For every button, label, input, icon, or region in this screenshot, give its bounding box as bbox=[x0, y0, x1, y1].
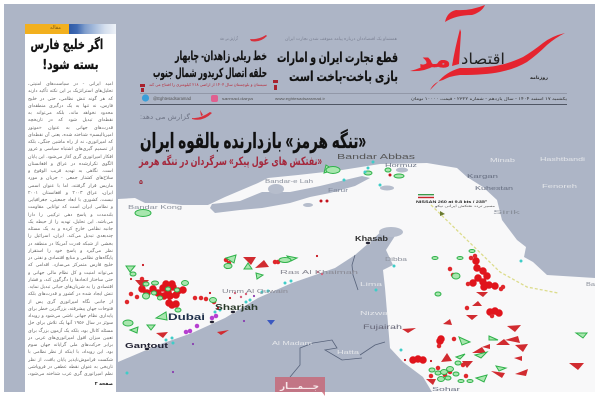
page reference: صفحه ۲ bbox=[95, 382, 113, 387]
twitter handle: @Eghtesadsaramad bbox=[153, 96, 192, 101]
headline line one: خط ریلی زاهدان- چابهار bbox=[174, 49, 267, 63]
icon: page mark bbox=[273, 80, 278, 90]
kicker text: گزارش می دهد: bbox=[140, 113, 191, 121]
column title line one: اگر خلیج فارس bbox=[30, 37, 103, 53]
logo tail stroke bbox=[410, 62, 434, 71]
masthead logo: Sarāmad bbox=[410, 5, 565, 90]
kicker: همشتاو یک اقتصاددان درباره پیامد متوقف شدن تجارت ایران bbox=[285, 36, 398, 41]
icon: instagram bbox=[211, 95, 218, 102]
headline line one: قطع تجارت ایران و امارات bbox=[277, 50, 398, 65]
headline line two: حلقه اتصال کریدور شمال جنوب bbox=[153, 66, 267, 80]
map: red ship arrows bbox=[135, 257, 584, 385]
page mark red: ۵ bbox=[139, 180, 143, 186]
map: light place labels: Hatta bbox=[337, 350, 361, 356]
map: borders bbox=[290, 255, 385, 377]
website: www.eghtesadsaramad.ir bbox=[275, 96, 326, 101]
map: dark place labels: Bandar Abbas bbox=[337, 152, 415, 161]
map: light place labels: Dibba bbox=[385, 257, 408, 263]
kicker logo bbox=[192, 110, 212, 120]
map: small islands bbox=[268, 168, 408, 237]
map: Strait of Hormuz ship traffic bbox=[118, 152, 596, 393]
logo alef stroke bbox=[452, 29, 461, 66]
map: dark place labels: Gantout bbox=[125, 343, 169, 350]
map: dark place labels: Sharjah bbox=[215, 303, 258, 312]
watermark badge bbox=[275, 377, 325, 396]
map: tanker track bbox=[431, 205, 558, 293]
map: light place labels: Kargan bbox=[467, 174, 498, 180]
panel: opinion column bbox=[25, 24, 116, 392]
map: light place labels: Hormuz bbox=[385, 163, 417, 169]
map: sea area bbox=[118, 163, 595, 392]
map: red ship clusters bbox=[127, 256, 503, 376]
story two: Zahedan Chabahar rail bbox=[140, 35, 267, 92]
map: Qeshm island bbox=[210, 176, 370, 213]
icon: Iran flag bbox=[418, 194, 434, 198]
map: light place labels: Lima bbox=[360, 282, 384, 288]
headline line two: بازی باخت-باخت است bbox=[289, 69, 398, 84]
map: light place labels: Umm Al Quwain bbox=[222, 289, 288, 295]
story one: Iran UAE trade bbox=[273, 36, 398, 90]
map: light place labels: Nizwa bbox=[360, 311, 390, 317]
map: light place labels: Ras Al Khaimah bbox=[280, 270, 358, 276]
column title line two: بسته شود! bbox=[42, 57, 99, 73]
kicker logo bbox=[250, 35, 267, 41]
logo word: مد bbox=[419, 47, 451, 72]
logo long swash bbox=[430, 33, 565, 90]
kicker: گزارش می دهد bbox=[220, 35, 238, 41]
map: teal and purple markers bbox=[127, 162, 521, 373]
daily label: روزنامه bbox=[530, 75, 548, 81]
map: light place labels: Kuhestan bbox=[475, 186, 513, 192]
map: dark place labels bbox=[125, 152, 415, 350]
icon: page mark bbox=[140, 84, 145, 92]
issue details: یکشنبه ۱۷ اسفند ۱۴۰۴ - سال یازدهم - شماره ۲۳۲۲ - قیمت ۱۰۰۰۰ تومان bbox=[411, 96, 568, 101]
info bar bbox=[140, 93, 568, 105]
map: light place labels: Ba bbox=[586, 282, 596, 288]
map: Nissan tanker label bbox=[416, 194, 496, 216]
map: light place labels: Fenoreh bbox=[542, 184, 577, 190]
red strapline: سیستان و بلوچستان سال ۱۴۰۴ از اراضی ۲۱۸ کیلومتری را افتتاح می کند bbox=[149, 82, 267, 87]
sub headline: «نفتکش های غول پیکر» سرگردان در تنگه هرمز bbox=[138, 154, 322, 169]
map: light place labels: Bandar-e Lah bbox=[265, 179, 313, 185]
map: light place labels: Farur bbox=[328, 188, 348, 194]
map: dark place labels: Khasab bbox=[355, 234, 389, 243]
map: light place labels: Bandar Kong bbox=[128, 205, 182, 211]
map: light place labels: Hashtbandi bbox=[540, 157, 585, 163]
map: light place labels: Sohar bbox=[432, 387, 460, 393]
map: light place labels: Minab bbox=[490, 158, 515, 164]
ship note: مسیر تردد نفتکش ایرانی نیکو bbox=[433, 204, 496, 208]
map: dark place labels: Fujairah bbox=[363, 325, 402, 331]
main headline: «تنگه هرمز» بازدارنده بالقوه ایران bbox=[140, 128, 366, 153]
map: light place labels bbox=[128, 157, 596, 393]
watermark text: جـــمـــار bbox=[279, 381, 319, 392]
logo subtitle: اقتصاد bbox=[461, 51, 505, 68]
icon: twitter bbox=[142, 94, 149, 102]
map: city dots bbox=[145, 242, 370, 350]
column header band: مقاله bbox=[50, 25, 61, 31]
map: light place labels: Al Madam bbox=[272, 341, 313, 347]
icon: ship arrow bbox=[440, 211, 445, 216]
map: dark place labels: Dubai bbox=[168, 312, 205, 322]
ship name: NISSAN 260 at 9.8 kts / 235° bbox=[416, 200, 488, 204]
map: green ship rings and arrows bbox=[123, 165, 587, 382]
section kicker: report bbox=[140, 110, 212, 121]
instagram handle: sarmad.darya bbox=[222, 96, 254, 101]
logo madda stroke bbox=[445, 5, 485, 22]
column header band bbox=[25, 24, 116, 34]
map: light place labels: Sirik bbox=[493, 210, 521, 216]
